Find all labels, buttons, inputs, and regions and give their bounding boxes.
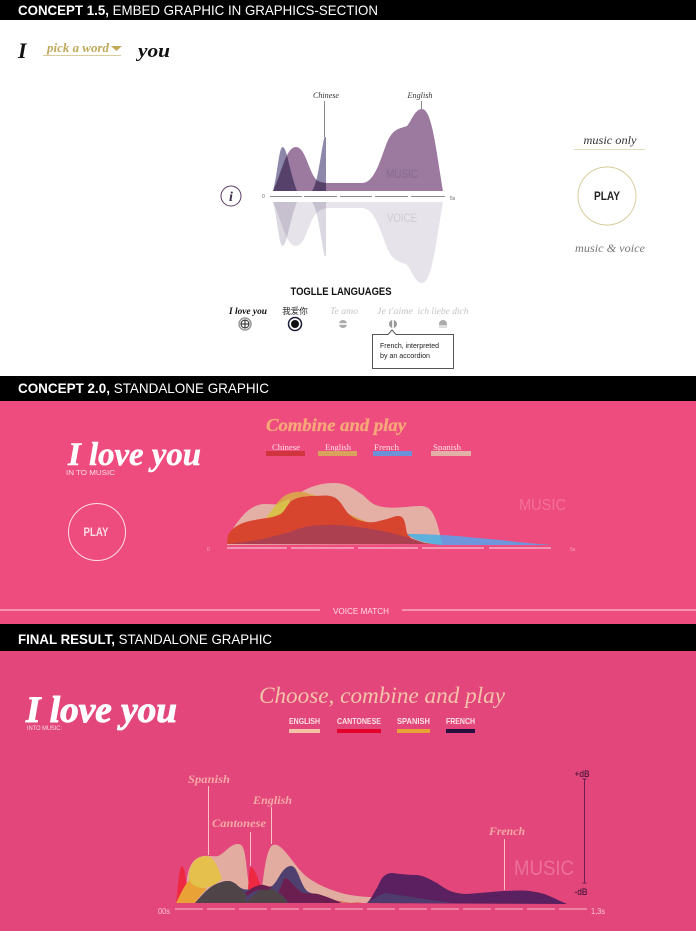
cantonese callout bbox=[212, 818, 266, 866]
panel: concept 2.0 bbox=[0, 376, 696, 624]
spanish callout: Spanish bbox=[188, 774, 230, 786]
cantonese area bbox=[176, 866, 261, 903]
spanish callout bbox=[188, 774, 230, 855]
english callout: English bbox=[406, 91, 432, 100]
chart: final waveform: 00s bbox=[158, 907, 170, 916]
panel: concept 1.5 bbox=[0, 0, 696, 376]
legend bbox=[289, 716, 475, 733]
heading: concept 2.0 bbox=[0, 376, 696, 401]
english area bbox=[186, 844, 377, 903]
overlap maroon area bbox=[245, 878, 342, 903]
axis bbox=[270, 196, 445, 198]
chinese callout bbox=[313, 91, 339, 137]
music label: MUSIC bbox=[519, 497, 566, 514]
play button bbox=[68, 504, 126, 560]
overlap dark blue area bbox=[195, 866, 340, 903]
sentence: I pick a word you: you bbox=[136, 41, 170, 62]
french callout bbox=[488, 826, 525, 890]
english callout bbox=[406, 91, 432, 109]
toggle: French: Je t'aime bbox=[377, 306, 413, 316]
legend: SPANISH bbox=[397, 716, 430, 726]
decibel scale: -dB bbox=[574, 887, 588, 897]
french area bbox=[407, 534, 552, 545]
legend: CANTONESE bbox=[337, 716, 381, 726]
decibel scale: +dB bbox=[574, 769, 590, 779]
french callout: French bbox=[488, 826, 525, 838]
legend: English bbox=[325, 442, 352, 452]
play control: music & voice bbox=[575, 241, 646, 255]
toggle: Spanish: Te amo bbox=[330, 306, 359, 316]
chart: combined languages: 0 bbox=[207, 547, 210, 553]
voice match divider: VOICE MATCH bbox=[333, 607, 389, 616]
toggle: Chinese bbox=[282, 305, 308, 330]
toggle: I love you bbox=[228, 306, 267, 330]
play control: music only bbox=[584, 133, 637, 147]
overlap olive area bbox=[195, 881, 287, 903]
tooltip: by an accordion bbox=[380, 351, 430, 360]
tooltip bbox=[372, 330, 454, 368]
info icon: i bbox=[229, 190, 233, 205]
axis bbox=[175, 908, 587, 910]
legend: Spanish bbox=[433, 442, 462, 452]
tooltip: French, interpreted bbox=[380, 341, 439, 350]
title: I love you: I love you bbox=[25, 690, 177, 731]
toggle languages: TOGLLE LANGUAGES bbox=[290, 286, 392, 298]
heading: concept 2.0: CONCEPT 2.0, STANDALONE GRAPHIC bbox=[18, 380, 269, 396]
title: I love you: IN TO MUSIC bbox=[66, 468, 116, 477]
sentence: I pick a word you: pick a word bbox=[46, 41, 110, 55]
chart: music and voice waveforms: 0 bbox=[262, 194, 265, 200]
legend bbox=[266, 442, 471, 456]
heading: concept 1.5: CONCEPT 1.5, EMBED GRAPHIC IN GRAPHICS-SECTION bbox=[18, 2, 378, 18]
legend: ENGLISH bbox=[289, 716, 320, 726]
toggle: French bbox=[377, 306, 413, 328]
toggle: Spanish bbox=[330, 306, 359, 328]
play control bbox=[574, 133, 646, 255]
play button: PLAY bbox=[84, 527, 109, 539]
sentence: I pick a word you: I bbox=[17, 38, 28, 63]
panel: final result bbox=[0, 624, 696, 931]
play control: PLAY bbox=[594, 189, 620, 203]
title: I love you: INTO MUSIC: bbox=[27, 726, 62, 732]
info icon bbox=[221, 186, 241, 206]
english area bbox=[267, 492, 367, 525]
cantonese callout: Cantonese bbox=[212, 818, 266, 830]
toggle: I love you: I love you bbox=[228, 306, 267, 316]
voice label: VOICE bbox=[387, 211, 417, 225]
toggle languages bbox=[228, 286, 469, 368]
music area bbox=[273, 109, 443, 191]
spanish area bbox=[176, 880, 207, 903]
legend: FRENCH bbox=[446, 716, 475, 726]
english callout bbox=[252, 795, 292, 844]
chart: final waveform: 1,3s bbox=[591, 907, 605, 916]
voice area bbox=[273, 202, 443, 283]
heading: final result bbox=[0, 624, 696, 651]
axis bbox=[227, 547, 551, 549]
music label: MUSIC bbox=[386, 167, 418, 181]
toggle: German bbox=[418, 306, 469, 328]
spanish area bbox=[227, 483, 442, 545]
heading: concept 1.5 bbox=[0, 0, 696, 20]
french area bbox=[367, 873, 567, 904]
heading: final result: FINAL RESULT, STANDALONE GRAPHIC bbox=[18, 631, 272, 647]
sentence: I pick a word you bbox=[17, 38, 170, 63]
chart: music and voice waveforms bbox=[262, 91, 456, 283]
title: I love you: I love you bbox=[67, 437, 201, 473]
lower dark area bbox=[227, 525, 427, 544]
english callout: English bbox=[252, 795, 292, 807]
chinese area bbox=[227, 496, 433, 544]
heading: Combine and play: Combine and play bbox=[266, 415, 407, 435]
toggle: Chinese: 我爱你 bbox=[282, 305, 308, 317]
chart: music and voice waveforms: 5s bbox=[450, 196, 456, 202]
legend: French bbox=[374, 442, 400, 452]
chinese music area bbox=[273, 137, 326, 191]
music label: MUSIC bbox=[514, 857, 574, 880]
heading: Choose, combine and play: Choose, combine and play bbox=[259, 683, 506, 708]
chinese callout: Chinese bbox=[313, 91, 339, 100]
chart: combined languages bbox=[207, 483, 576, 553]
legend: Chinese bbox=[272, 442, 300, 452]
chart: combined languages: 5s bbox=[570, 547, 576, 553]
toggle: German: ich liebe dich bbox=[418, 306, 469, 316]
chart: final waveform bbox=[158, 769, 605, 916]
decibel scale bbox=[574, 769, 590, 897]
